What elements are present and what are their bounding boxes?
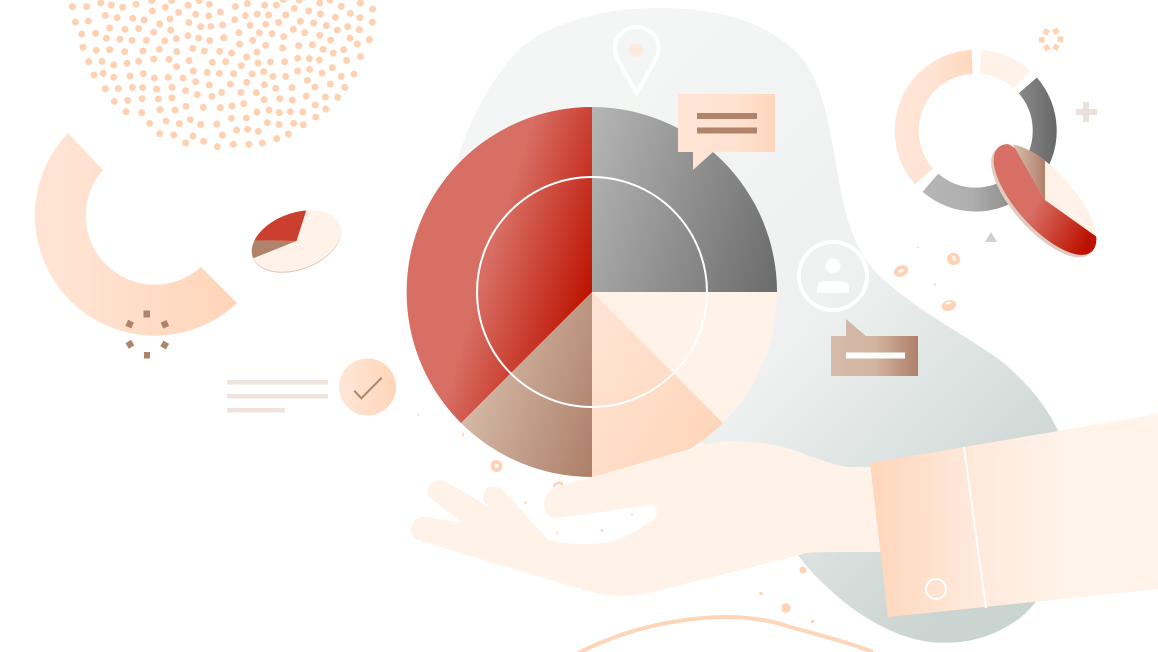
speckle behind blob xyxy=(800,566,806,574)
speckles right xyxy=(759,247,962,623)
left ring chart xyxy=(35,133,237,336)
dotted semicircle xyxy=(72,0,373,147)
bottom curve xyxy=(578,617,873,652)
segment: red xyxy=(407,107,592,423)
checklist lines xyxy=(227,380,328,412)
inner ring xyxy=(477,177,707,407)
icon: brown square dots xyxy=(125,310,169,358)
tilted oval pie chart xyxy=(991,144,1096,258)
icon: check mark circle xyxy=(339,358,396,416)
speech bubble top xyxy=(678,94,775,170)
speech bubble lower xyxy=(831,319,918,376)
shirt cuff xyxy=(870,414,1158,617)
segment: cream xyxy=(592,292,777,423)
icon: user avatar xyxy=(799,242,867,310)
right donut chart xyxy=(907,62,1045,200)
icon: triangle xyxy=(985,232,997,242)
icon: location pin xyxy=(615,27,659,93)
main pie chart xyxy=(407,107,777,477)
small tilted pie chart xyxy=(252,210,342,273)
icon: plus xyxy=(1076,102,1097,122)
icon: peach square ring xyxy=(1039,27,1063,51)
segment: peach xyxy=(592,292,723,477)
segment: grey xyxy=(592,107,777,292)
background blob xyxy=(450,8,1066,643)
hand xyxy=(411,441,885,596)
speckles left xyxy=(418,414,633,534)
segment: brown xyxy=(461,292,592,477)
